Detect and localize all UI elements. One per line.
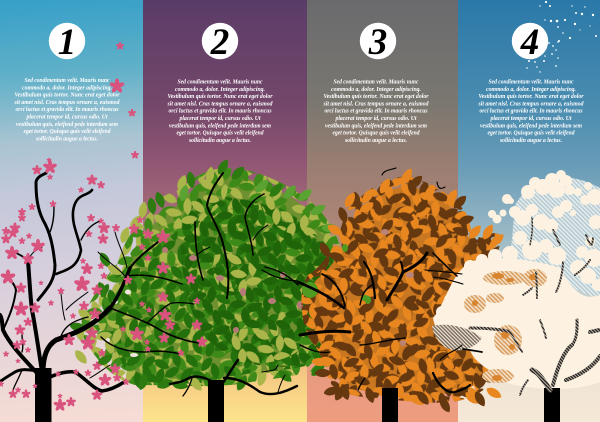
falling petals [46, 42, 139, 162]
text block 2: placerat tempor id, cursus odio. Ut [179, 115, 261, 122]
number badge 1: 1 [58, 22, 76, 63]
text block 4: orci luctus et gravida elit. In mauris rhoncus [480, 108, 583, 115]
text block 1: eget tortor. Quisque quis velit eleifend [24, 128, 111, 135]
text block 3 [323, 78, 429, 144]
branches: winter tree [470, 218, 600, 395]
text block 1: vestibulum quis, eleifend pede interdum sem [16, 121, 118, 128]
panel: autumn background [307, 0, 458, 422]
number badge 3: 3 [368, 22, 387, 63]
text block 4: Sed condimentum velit. Mauris nunc [488, 78, 574, 86]
text block 4 [478, 78, 584, 144]
number badge 3 [360, 22, 396, 63]
text block 3: vestibulum quis, eleifend pede interdum sem [325, 122, 427, 129]
text block 1: sit amet nisl. Cras tempus ornare a, euismod [14, 99, 120, 106]
autumn tree foliage [301, 167, 509, 414]
text block 1: placerat tempor id, cursus odio. Ut [26, 114, 108, 120]
panel: winter background [458, 0, 600, 422]
text block 3: sollicitudin augue a lectus. [344, 137, 407, 144]
trunk: autumn [382, 388, 398, 422]
branches: spring tree [0, 173, 158, 393]
branches: summer tree [101, 173, 298, 396]
text block 4: eget tortor. Quisque quis velit eleifend [488, 130, 575, 137]
text block 4: placerat tempor id, cursus odio. Ut [490, 115, 572, 122]
panel: spring background [0, 0, 143, 422]
text block 2: sit amet nisl. Cras tempus ornare a, euismod [167, 100, 273, 107]
text block 1: Vestibulum quis tortor. Nunc erat eget dolor [14, 92, 120, 99]
trunk: spring [35, 368, 52, 422]
text block 1: commodo a, dolor. Integer adipiscing. [22, 84, 112, 91]
text block 4: Vestibulum quis tortor. Nunc erat eget dolor [478, 93, 584, 100]
text block 4: sollicitudin augue a lectus. [499, 137, 562, 144]
flowers: cherry blossoms [0, 160, 208, 411]
number badge 4: 4 [520, 22, 539, 63]
text block 4: vestibulum quis, eleifend pede interdum sem [480, 122, 582, 129]
text block 1: orci luctus et gravida elit. In mauris rhoncus [16, 106, 119, 113]
panel: summer background [143, 0, 307, 422]
branches: autumn tree [298, 168, 482, 392]
trunk: summer [208, 380, 224, 422]
text block 2: Vestibulum quis tortor. Nunc erat eget dolor [168, 93, 273, 100]
trunk: winter [544, 388, 560, 422]
text block 3: orci luctus et gravida elit. In mauris rhoncus [324, 108, 428, 115]
text block 1 [14, 77, 120, 142]
text block 3: Sed condimentum velit. Mauris nunc [334, 78, 419, 86]
text block 3: commodo a, dolor. Integer adipiscing. [331, 86, 421, 93]
text block 4: sit amet nisl. Cras tempus ornare a, euismod [478, 100, 584, 107]
text block 4: commodo a, dolor. Integer adipiscing. [486, 86, 576, 93]
number badge 4 [512, 22, 548, 63]
text block 2: commodo a, dolor. Integer adipiscing. [175, 86, 265, 93]
text block 2: Sed condimentum velit. Mauris nunc [178, 78, 263, 86]
text block 2: orci luctus et gravida elit. In mauris rhoncus [168, 108, 272, 115]
number badge 1 [49, 22, 85, 63]
number badge 2 [202, 22, 238, 63]
text block 2: sollicitudin augue a lectus. [188, 137, 251, 144]
text block 3: Vestibulum quis tortor. Nunc erat eget dolor [324, 93, 429, 100]
text block 2: eget tortor. Quisque quis velit eleifend [176, 130, 264, 137]
winter tree foliage [432, 170, 600, 389]
text block 1: Sed condimentum velit. Mauris nunc [24, 77, 110, 84]
text block 3: eget tortor. Quisque quis velit eleifend [332, 130, 420, 137]
text block 3: placerat tempor id, cursus odio. Ut [335, 115, 417, 122]
text block 3: sit amet nisl. Cras tempus ornare a, euismod [323, 100, 429, 107]
number badge 2: 2 [210, 22, 229, 63]
text block 2 [167, 78, 273, 144]
text block 2: vestibulum quis, eleifend pede interdum sem [169, 122, 271, 129]
snow specks [526, 1, 597, 73]
summer tree foliage [69, 158, 351, 393]
text block 1: sollicitudin augue a lectus. [35, 135, 98, 142]
